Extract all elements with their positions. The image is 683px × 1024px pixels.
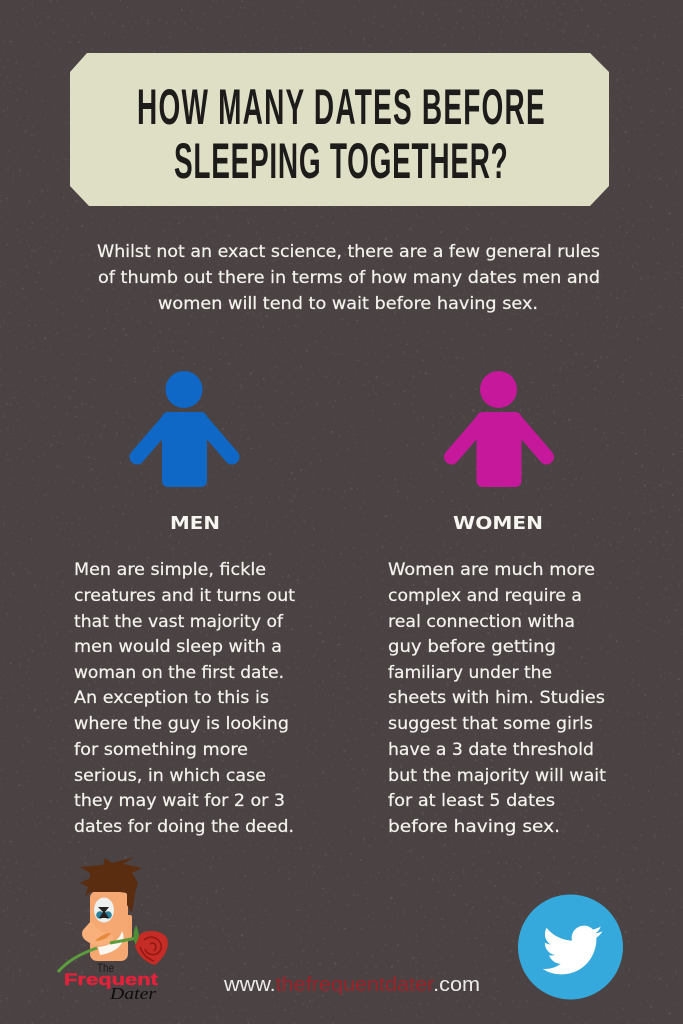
icon: rose leaf: [134, 925, 139, 948]
intro paragraph: women will tend to wait before having sex.: [158, 294, 538, 314]
intro paragraph: of thumb out there in terms of how many dates men and: [98, 268, 600, 288]
text: women column: guy before getting: [388, 637, 556, 657]
text: men column: woman on the first date.: [74, 663, 284, 683]
text: men column: where the guy is looking: [74, 714, 289, 734]
icon: nose shadow: [95, 933, 111, 941]
text: men column: [74, 560, 295, 837]
icon: eyes: [94, 898, 114, 922]
website url: www.thefrequentdater .com: [223, 974, 480, 996]
text: women column: real connection witha: [388, 612, 575, 632]
text: men column: for something more: [74, 740, 248, 760]
text: men column: An exception to this is: [74, 688, 269, 708]
icon: nose: [82, 921, 114, 945]
text: men column: they may wait for 2 or 3: [74, 791, 285, 811]
heading: women: WOMEN: [453, 513, 543, 534]
text: women column: suggest that some girls: [388, 714, 593, 734]
title banner: [70, 53, 609, 206]
text: women column: but the majority will wait: [388, 766, 606, 786]
icon: rose stem: [58, 938, 136, 972]
icon: face: [90, 891, 128, 961]
text: women column: familiary under the: [388, 663, 552, 683]
text: men column: Men are simple, fickle: [74, 560, 266, 580]
text: women column: sheets with him. Studies: [388, 688, 605, 708]
title text: HOW MANY DATES BEFORE: [137, 78, 545, 135]
text: women column: have a 3 date threshold: [388, 740, 594, 760]
icon: twitter bird: [542, 926, 602, 974]
icon: rose: [135, 931, 168, 965]
text: men column: that the vast majority of: [74, 612, 284, 632]
logo text: The: The: [97, 961, 114, 975]
text: men column: men would sleep with a: [74, 637, 282, 657]
text: women column: Women are much more: [388, 560, 595, 580]
text: women column: complex and require a: [388, 586, 582, 606]
text: men column: creatures and it turns out: [74, 586, 295, 606]
text: men column: dates for doing the deed.: [74, 817, 294, 837]
title text: SLEEPING TOGETHER?: [174, 132, 508, 189]
text: women column: for at least 5 dates: [388, 791, 555, 811]
text: women column: before having sex.: [388, 817, 560, 837]
intro paragraph: [97, 242, 600, 314]
logo text: Dater: Dater: [109, 984, 156, 1003]
intro paragraph: Whilst not an exact science, there are a few general rules: [97, 242, 600, 262]
icon: smile: [98, 931, 124, 955]
heading: men: MEN: [170, 513, 220, 534]
icon: twitter badge: [518, 894, 623, 1000]
text: men column: serious, in which case: [74, 766, 266, 786]
icon: ear: [124, 915, 132, 938]
icon: woman figure: [452, 371, 546, 487]
text: women column: [388, 560, 606, 837]
logo text: Frequent: Frequent: [64, 970, 158, 989]
logo: The Frequent Dater: [58, 857, 168, 1003]
icon: hair: [80, 857, 142, 913]
title text: [137, 78, 545, 189]
icon: man figure: [137, 371, 232, 487]
